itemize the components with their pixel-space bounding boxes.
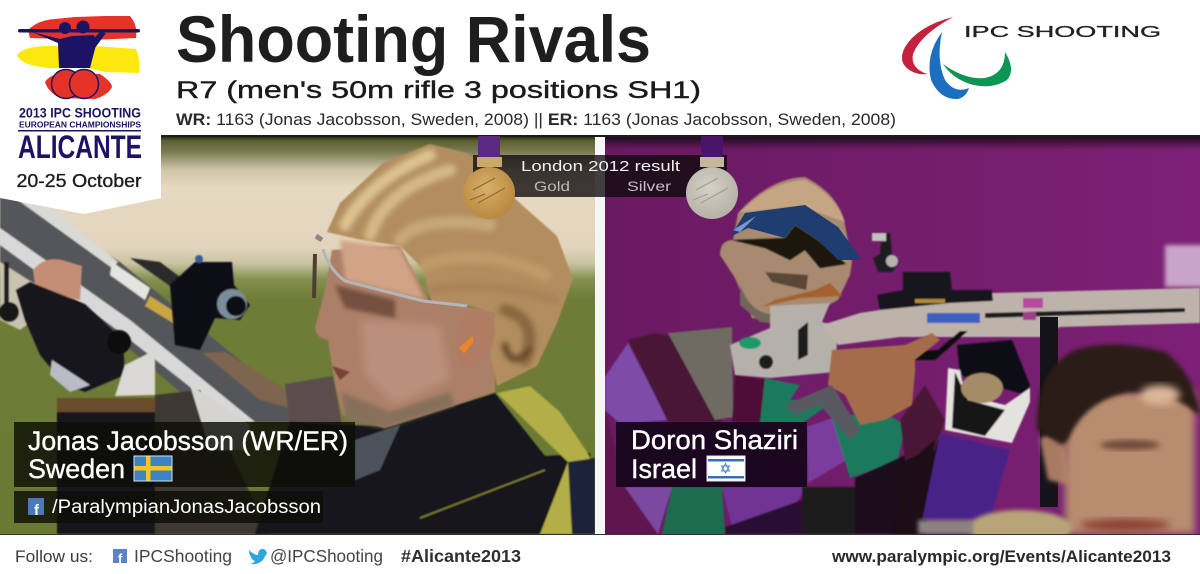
blurred foreground blond head xyxy=(915,507,1073,534)
support post xyxy=(1040,317,1058,507)
logo: Alicante championships xyxy=(17,16,142,165)
footer: hashtag: #Alicante2013 xyxy=(401,546,521,566)
sunglasses and visor xyxy=(730,205,862,268)
photo: Jonas Jacobsson aiming xyxy=(0,136,595,534)
panel: London 2012 result xyxy=(473,155,727,197)
neck and face xyxy=(315,240,495,428)
icon: Facebook xyxy=(113,549,127,566)
grip and glove xyxy=(895,340,1030,534)
event dates: 20-25 October xyxy=(16,171,142,191)
hand and glove xyxy=(16,259,155,396)
icon: Facebook: f xyxy=(118,551,123,566)
icon: Israeli flag xyxy=(707,456,745,481)
divider between photos xyxy=(595,136,605,534)
gun rest xyxy=(57,385,270,534)
logo panel: Alicante 2013 white tab xyxy=(0,0,161,214)
glasses xyxy=(314,236,467,306)
label: Doron Shaziri name: Israel xyxy=(631,454,697,484)
footer: follow us: Follow us: xyxy=(15,548,93,566)
label: Facebook page: f xyxy=(34,502,40,519)
title: Shooting Rivals xyxy=(176,2,651,76)
panel: London 2012 result: Gold xyxy=(534,178,570,194)
head and face xyxy=(720,177,852,325)
footer: Twitter handle: @IPCShooting xyxy=(270,546,383,566)
logo: Alicante championships: ALICANTE xyxy=(18,129,142,165)
rifle xyxy=(822,233,1200,360)
event subtitle: R7 (men's 50m rifle 3 positions SH1) xyxy=(176,77,701,104)
logo: IPC Shooting agitos xyxy=(902,17,1161,99)
photo: Doron Shaziri aiming xyxy=(605,136,1200,546)
label: Doron Shaziri name: Doron Shaziri xyxy=(631,425,798,455)
top edge of photos xyxy=(161,135,1200,137)
logo: Alicante championships: 2013 IPC SHOOTING xyxy=(19,104,141,120)
icon: Swedish flag xyxy=(134,456,172,481)
icon: Twitter bird xyxy=(249,549,267,564)
logo: Alicante championships: EUROPEAN CHAMPIONSHIPS xyxy=(19,120,142,130)
footer: website: www.paralympic.org/Events/Alicante2013 xyxy=(831,547,1171,566)
label: Jonas Jacobsson name: Sweden xyxy=(28,454,125,484)
label: Jonas Jacobsson name: Jonas Jacobsson (WR/ER) xyxy=(28,426,348,456)
panel: London 2012 result: London 2012 result xyxy=(521,159,680,175)
footer: Facebook handle: IPCShooting xyxy=(134,546,232,566)
records line: WR: 1163 (Jonas Jacobsson, Sweden, 2008) || ER: 1163 (Jonas Jacobsson, Sweden, 2008) xyxy=(176,111,896,129)
label: Facebook page: /ParalympianJonasJacobsson xyxy=(52,497,321,518)
jacket xyxy=(255,376,595,534)
blurred foreground person xyxy=(1037,344,1200,534)
hand xyxy=(785,333,940,440)
rifle xyxy=(0,196,300,422)
blurred background sign xyxy=(1165,245,1200,287)
cheek rest and stock xyxy=(730,283,842,378)
label: Jonas Jacobsson name xyxy=(14,422,355,487)
icon: silver medal xyxy=(686,136,738,219)
icon: gold medal xyxy=(463,136,515,219)
label: Facebook page xyxy=(14,491,323,523)
blond hair xyxy=(327,144,573,386)
jacket xyxy=(605,327,945,534)
bottom edge of photos xyxy=(0,534,1200,535)
label: Doron Shaziri name xyxy=(616,422,807,487)
scope xyxy=(170,255,250,350)
ear and earplug xyxy=(458,326,495,354)
panel: London 2012 result: Silver xyxy=(627,178,671,194)
logo: IPC Shooting agitos: IPC SHOOTING xyxy=(964,24,1161,41)
